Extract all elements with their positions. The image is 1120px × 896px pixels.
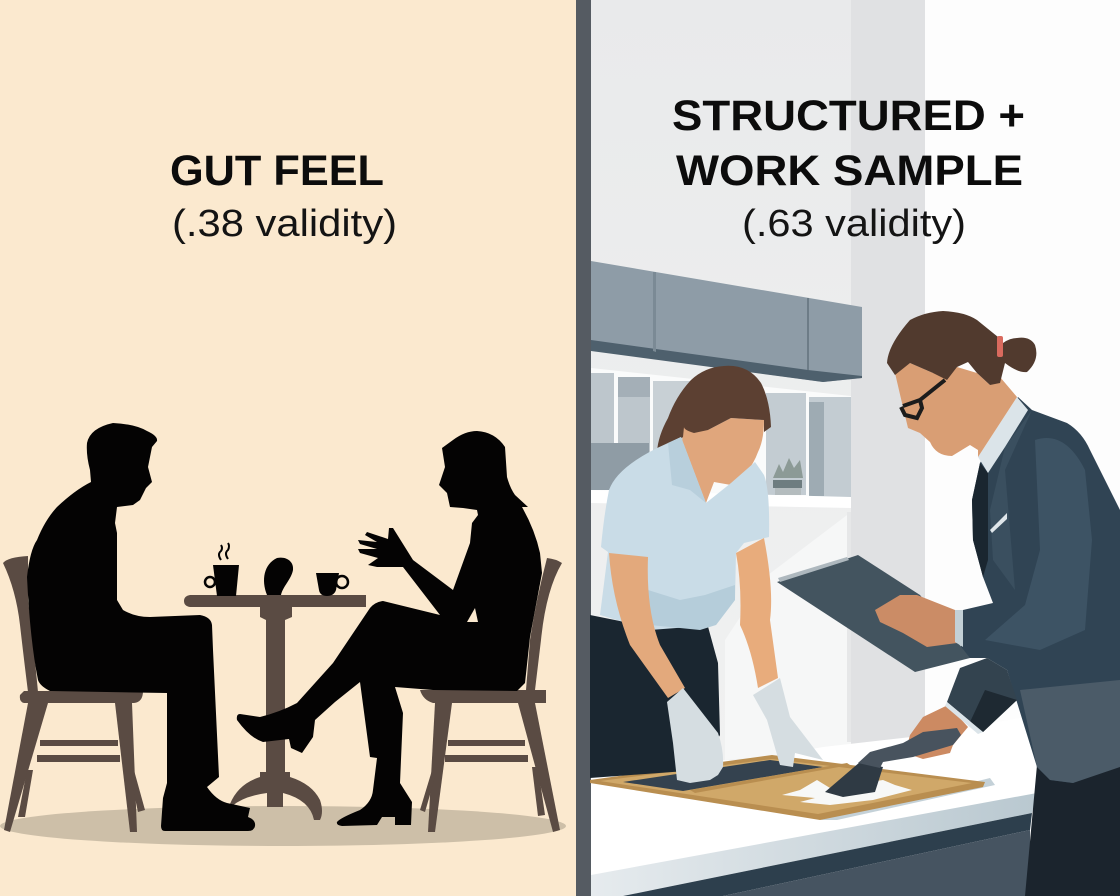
divider	[576, 0, 591, 896]
coffee cup right	[316, 573, 348, 596]
lower jacket tail	[1020, 680, 1120, 783]
jacket back and tail	[960, 397, 1120, 783]
hair	[657, 366, 771, 452]
floor shadow	[0, 806, 566, 846]
brush hand	[905, 705, 968, 759]
heading: structured + work sample: STRUCTURED +	[672, 92, 1025, 140]
plant	[773, 458, 803, 495]
left chair	[3, 556, 145, 832]
lower wall	[725, 512, 851, 760]
cabinets	[591, 261, 862, 382]
skirt	[590, 615, 720, 778]
sleeve highlight	[985, 438, 1092, 650]
clipboard	[777, 555, 970, 672]
trousers	[1025, 760, 1120, 896]
collar	[668, 437, 706, 503]
shirt cuff	[945, 702, 983, 734]
hand on clipboard	[875, 595, 957, 647]
right glove	[753, 678, 823, 767]
subheading: structured validity: (.63 validity)	[742, 203, 966, 245]
right arm	[736, 538, 778, 688]
coffee cup left	[205, 543, 239, 596]
panel: gut feel	[0, 0, 576, 896]
collar	[978, 397, 1028, 473]
lower sleeve	[947, 658, 1017, 732]
heading: structured + work sample	[672, 92, 1025, 195]
vase object	[264, 558, 293, 595]
heading: structured + work sample: WORK SAMPLE	[676, 147, 1023, 195]
tie	[972, 463, 988, 577]
woman silhouette	[237, 431, 542, 826]
neck and face	[681, 418, 764, 503]
cuff	[955, 610, 963, 647]
shelves	[591, 368, 851, 508]
right chair	[420, 558, 562, 832]
pocket square	[990, 513, 1007, 533]
head	[895, 363, 1017, 457]
hair	[887, 311, 1036, 385]
lapel	[990, 410, 1032, 590]
counter	[591, 700, 1120, 896]
subheading: gut validity: (.38 validity)	[172, 203, 397, 245]
brush	[825, 728, 961, 797]
worker woman	[590, 366, 823, 783]
glasses	[901, 380, 945, 418]
inspector man	[777, 311, 1120, 896]
shirt	[600, 437, 769, 630]
panel: structured work sample	[590, 0, 1120, 896]
left arm	[609, 553, 685, 698]
tray	[590, 755, 995, 820]
table	[184, 595, 366, 820]
heading: gut feel: GUT FEEL	[170, 147, 384, 195]
gap between arm and torso	[467, 608, 478, 622]
man silhouette	[27, 423, 255, 831]
hair tie	[997, 336, 1003, 357]
left glove	[667, 688, 723, 783]
